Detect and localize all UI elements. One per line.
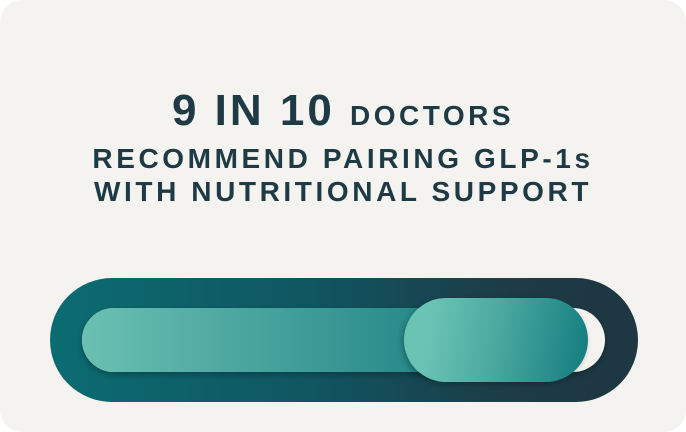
subtitle line 2: WITH NUTRITIONAL SUPPORT [94,176,592,207]
knob [404,298,588,382]
track [82,308,605,372]
title [92,86,594,207]
headline: 9 in 10 doctors: 9 IN 10 DOCTORS [172,86,514,135]
subtitle line 1: RECOMMEND PAIRING GLP-1s [92,143,594,174]
fill [82,308,522,372]
progress toggle bar [50,278,638,402]
